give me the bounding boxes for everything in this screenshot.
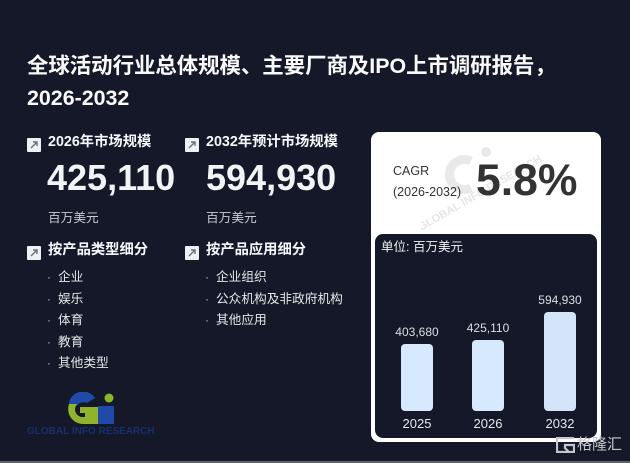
bar 2026 <box>467 321 509 411</box>
list: applications: · <box>205 270 209 284</box>
list: applications: · <box>205 292 209 306</box>
unit: 百万美元 <box>48 211 99 225</box>
number: 425,110: 425,110 <box>47 157 175 198</box>
heading: by product type: 按产品类型细分 <box>48 242 148 258</box>
year axis labels: 2026 <box>474 416 502 431</box>
logo: Gelonghui watermark <box>556 436 622 453</box>
value 2026: 425,110 <box>467 321 509 335</box>
value 2025: 403,680 <box>395 325 439 339</box>
heading: by application: 按产品应用细分 <box>206 242 306 258</box>
list: product types <box>47 270 109 370</box>
list: applications: 企业组织 <box>216 270 267 284</box>
text: 格隆汇: 格隆汇 <box>577 436 622 453</box>
bottom edge <box>0 461 630 463</box>
list: product types: 体育 <box>58 313 83 327</box>
icon: Gi mark <box>68 392 114 424</box>
number: 594,930: 594,930 <box>206 157 336 198</box>
year axis labels <box>403 416 574 431</box>
icon: arrow 2032 <box>185 138 199 152</box>
title: 全球活动行业总体规模、主要厂商及IPO上市调研报告， <box>27 54 556 78</box>
unit: 百万美元 <box>206 211 257 225</box>
list: product types: 其他类型 <box>58 356 109 370</box>
CAGR label <box>393 164 461 199</box>
year axis labels: 2025 <box>403 416 431 431</box>
list: product types: · <box>47 313 51 327</box>
icon: G mark <box>556 437 575 453</box>
heading: 2032 forecast: 2032年预计市场规模 <box>206 134 338 150</box>
icon: arrow application <box>185 246 199 260</box>
panel: 2032 forecast market size <box>185 134 338 225</box>
list: applications: 公众机构及非政府机构 <box>216 292 343 306</box>
year axis labels: 2032 <box>546 416 574 431</box>
panel: by product type <box>27 242 148 370</box>
value 2032: 594,930 <box>538 293 582 307</box>
list: applications: 其他应用 <box>216 313 267 327</box>
heading: 2026 market size: 2026年市场规模 <box>48 134 151 150</box>
CAGR label: CAGR <box>393 164 429 178</box>
icon: arrow type <box>27 246 41 260</box>
icon: arrow 2026 <box>27 138 41 152</box>
panel: by product application <box>185 242 343 327</box>
unit label: 单位: 百万美元 <box>381 240 463 254</box>
list: product types: 企业 <box>58 270 83 284</box>
title <box>27 54 556 110</box>
list: applications <box>205 270 343 327</box>
list: product types: · <box>47 335 51 349</box>
panel: CAGR card <box>371 132 601 442</box>
logo text: GLOBAL INFO RESEARCH <box>27 426 155 437</box>
bar 2032 <box>538 293 582 411</box>
list: product types: · <box>47 270 51 284</box>
list: product types: 娱乐 <box>58 292 83 306</box>
list: product types: · <box>47 292 51 306</box>
list: product types: 教育 <box>58 335 83 349</box>
panel: 2026 market size <box>27 134 175 225</box>
CAGR label: (2026-2032) <box>393 185 461 199</box>
title: 2026-2032 <box>27 86 129 110</box>
CAGR value: 5.8% <box>476 156 577 205</box>
list: product types: · <box>47 356 51 370</box>
bar 2025 <box>395 325 439 411</box>
panel: bar chart <box>375 234 597 438</box>
list: applications: · <box>205 313 209 327</box>
logo: Global Info Research <box>27 392 155 437</box>
